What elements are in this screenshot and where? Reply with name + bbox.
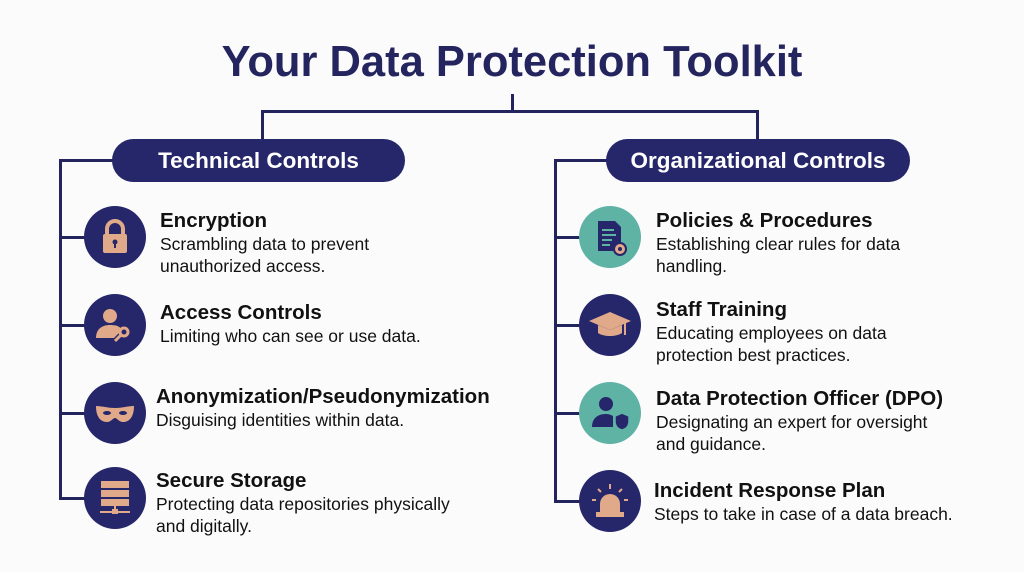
icon: officer shield — [579, 382, 641, 444]
heading: organizational controls — [606, 139, 910, 182]
text: secure storage: Protecting data repositories physically — [156, 494, 450, 514]
text: encryption — [160, 209, 369, 276]
text: policies: handling. — [656, 256, 727, 276]
icon: policy document — [579, 206, 641, 268]
text: incident response — [654, 479, 953, 524]
icon: graduation cap — [579, 294, 641, 356]
text: encryption: Scrambling data to prevent — [160, 234, 369, 254]
text: access controls: Limiting who can see or use data. — [160, 326, 421, 346]
icon: mask — [84, 382, 146, 444]
text: encryption: Encryption — [160, 209, 267, 232]
icon: lock — [84, 206, 146, 268]
panel: organizational controls — [579, 139, 953, 532]
icon: user key — [84, 294, 146, 356]
title: Your Data Protection Toolkit — [222, 38, 802, 86]
text: policies: Policies & Procedures — [656, 209, 872, 232]
icon: server — [84, 467, 146, 529]
text: access controls: Access Controls — [160, 301, 322, 324]
heading: technical controls — [112, 139, 405, 182]
text: access controls — [160, 301, 421, 346]
text: policies: Establishing clear rules for data — [656, 234, 900, 254]
text: incident response: Steps to take in case of a data breach. — [654, 504, 953, 524]
text: staff training: Staff Training — [656, 298, 787, 321]
text: secure storage: and digitally. — [156, 516, 252, 536]
heading: organizational controls: Organizational Controls — [630, 148, 886, 173]
text: staff training: Educating employees on data — [656, 323, 887, 343]
text: dpo: Designating an expert for oversight — [656, 412, 927, 432]
text: dpo: and guidance. — [656, 434, 766, 454]
text: dpo: Data Protection Officer (DPO) — [656, 387, 943, 410]
text: incident response: Incident Response Plan — [654, 479, 885, 502]
text: encryption: unauthorized access. — [160, 256, 325, 276]
panel: technical controls — [84, 139, 490, 536]
text: secure storage — [156, 469, 450, 536]
text: anonymization: Disguising identities within data. — [156, 410, 404, 430]
text: dpo — [656, 387, 943, 454]
text: policies — [656, 209, 900, 276]
text: staff training — [656, 298, 887, 365]
text: staff training: protection best practices. — [656, 345, 851, 365]
text: anonymization: Anonymization/Pseudonymization — [156, 385, 490, 408]
text: secure storage: Secure Storage — [156, 469, 306, 492]
heading: technical controls: Technical Controls — [158, 148, 359, 173]
icon: alarm — [579, 470, 641, 532]
text: anonymization — [156, 385, 490, 430]
